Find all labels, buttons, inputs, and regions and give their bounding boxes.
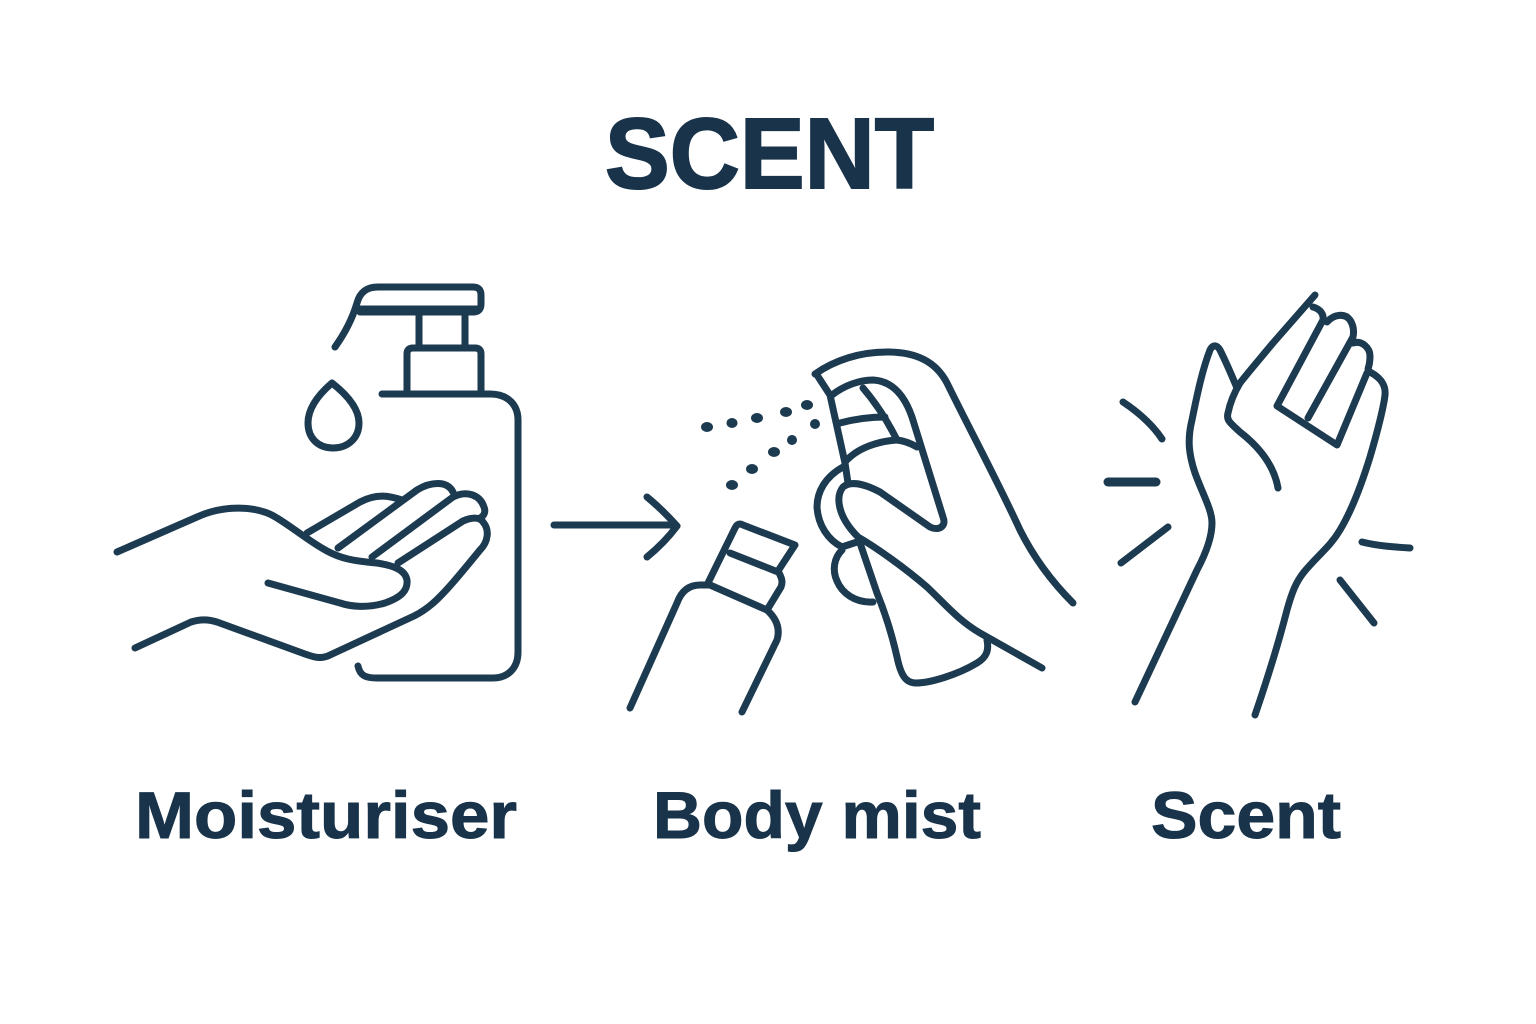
label: Moisturiser: Moisturiser xyxy=(135,778,517,852)
title: SCENT xyxy=(605,98,934,210)
scent rays xyxy=(1108,402,1410,623)
arrow xyxy=(554,497,677,557)
spray droplets xyxy=(701,400,820,490)
icon: pump bottle with hand xyxy=(117,287,518,678)
icon: wrist with scent rays xyxy=(1135,295,1385,715)
label: Body mist: Body mist xyxy=(653,778,981,852)
icon: spray bottle with hand and mist xyxy=(630,352,1073,712)
label: Scent: Scent xyxy=(1151,778,1341,852)
